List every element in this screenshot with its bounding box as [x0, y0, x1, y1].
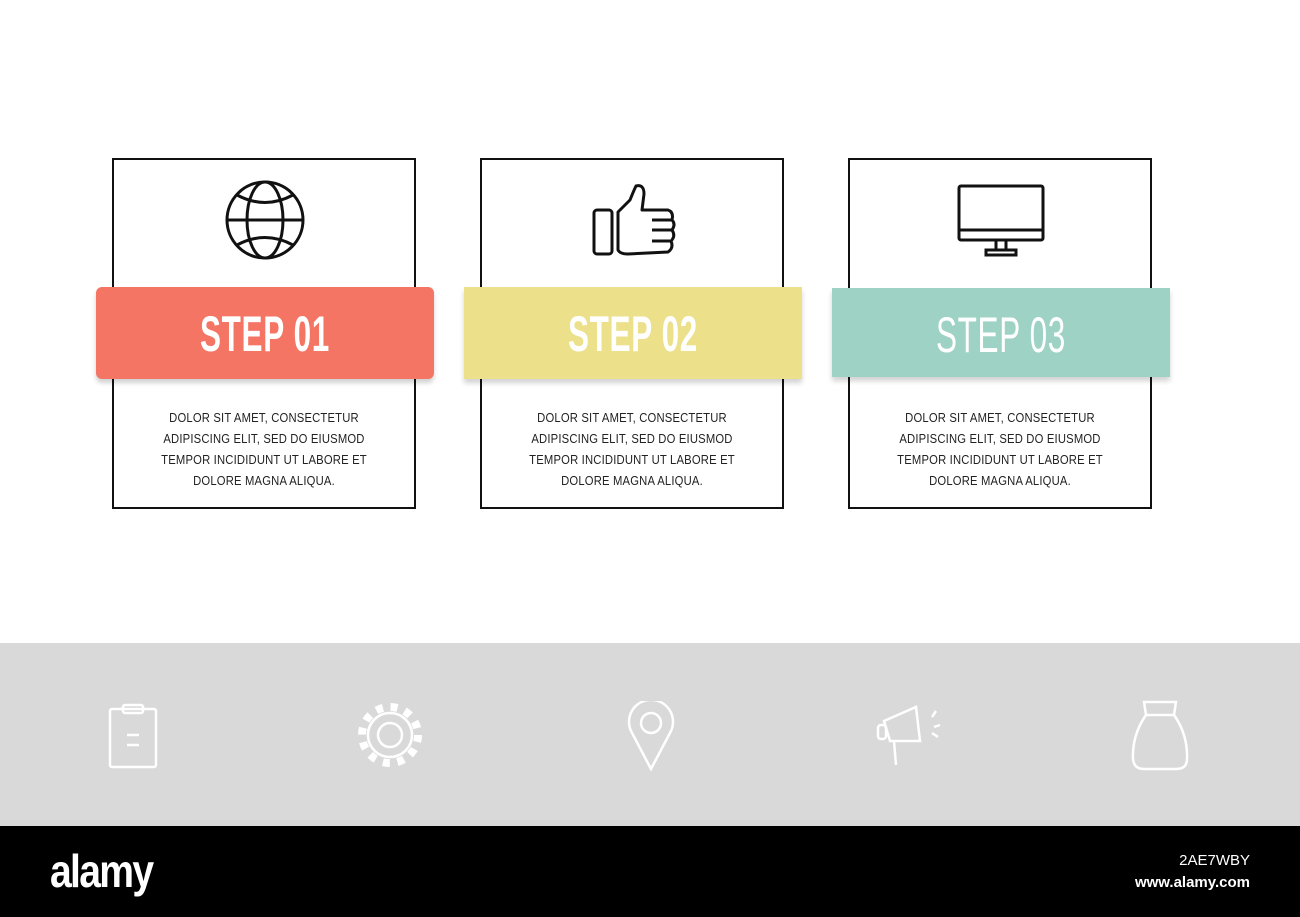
- text: brand: alamy: [50, 845, 152, 897]
- text: image id: www.alamy.com: [1135, 874, 1250, 891]
- ribbon: step 01: [96, 287, 434, 379]
- text: step 03 description: TEMPOR INCIDIDUNT UT LABORE ET: [897, 453, 1103, 467]
- text: step 01 description: DOLOR SIT AMET, CONSECTETUR: [169, 411, 359, 425]
- text: step 03 description: [897, 411, 1103, 488]
- ribbon: step 02: STEP 02: [568, 306, 698, 362]
- footer bar: [0, 826, 1300, 917]
- panel: step 02 card: [480, 158, 784, 509]
- text: step 01 description: DOLORE MAGNA ALIQUA.: [193, 474, 335, 488]
- text: image id: 2AE7WBY: [1179, 852, 1250, 869]
- text: step 02 description: TEMPOR INCIDIDUNT UT LABORE ET: [529, 453, 735, 467]
- text: step 01 description: [161, 411, 367, 488]
- text: step 02 description: [529, 411, 735, 488]
- text: step 01 description: TEMPOR INCIDIDUNT UT LABORE ET: [161, 453, 367, 467]
- icon: globe: [226, 180, 304, 260]
- text: step 03 description: DOLORE MAGNA ALIQUA.: [929, 474, 1071, 488]
- text: image id: [1135, 852, 1250, 891]
- panel: step 01 card: [112, 158, 416, 509]
- icon: map pin: [628, 701, 674, 771]
- text: step 02 description: ADIPISCING ELIT, SED DO EIUSMOD: [531, 432, 733, 446]
- panel: gray icon band: [0, 643, 1300, 826]
- icon: clipboard: [108, 704, 158, 768]
- text: step 02 description: DOLORE MAGNA ALIQUA.: [561, 474, 703, 488]
- ribbon: step 03: [832, 288, 1170, 377]
- text: step 01 description: ADIPISCING ELIT, SED DO EIUSMOD: [163, 432, 365, 446]
- text: step 03 description: ADIPISCING ELIT, SED DO EIUSMOD: [899, 432, 1101, 446]
- icon: gear: [358, 703, 422, 767]
- ribbon: step 01: STEP 01: [200, 306, 330, 362]
- ribbon: step 02: [464, 287, 802, 379]
- text: step 02 description: DOLOR SIT AMET, CONSECTETUR: [537, 411, 727, 425]
- icon: sack: [1132, 700, 1188, 770]
- icon: monitor: [958, 184, 1044, 256]
- icon: megaphone: [876, 705, 940, 765]
- ribbon: step 03: STEP 03: [936, 307, 1066, 363]
- icon: thumbs up: [592, 184, 676, 256]
- panel: step 03 card: [848, 158, 1152, 509]
- text: step 03 description: DOLOR SIT AMET, CONSECTETUR: [905, 411, 1095, 425]
